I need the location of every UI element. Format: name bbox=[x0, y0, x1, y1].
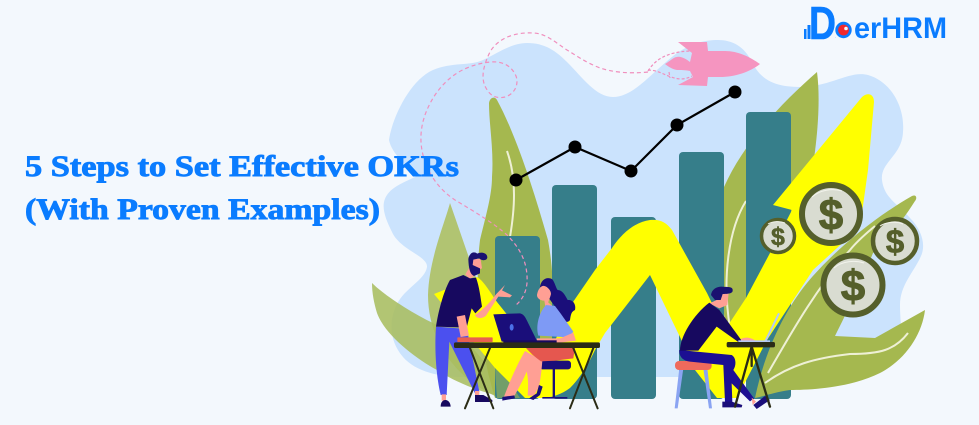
lower leaf tint over bar bbox=[495, 360, 520, 398]
logo target o: o bbox=[835, 37, 836, 39]
logo wordmark: erHRM bbox=[854, 12, 947, 45]
right upper leaf bbox=[755, 196, 925, 398]
title line 1: 5 Steps to Set Effective OKRs bbox=[25, 150, 459, 183]
dollar coins bbox=[762, 185, 917, 314]
line chart bbox=[510, 86, 742, 186]
tall left leaf bbox=[478, 98, 553, 398]
coin small bbox=[762, 220, 794, 252]
coin right bbox=[873, 219, 917, 263]
logo target o bbox=[835, 23, 850, 39]
seated man bbox=[679, 287, 770, 409]
background blob bbox=[384, 40, 923, 377]
coin top: $ bbox=[819, 191, 843, 240]
coin small: $ bbox=[771, 223, 785, 251]
rocket bbox=[665, 42, 760, 86]
yellow growth arrow bbox=[434, 94, 874, 398]
logo bbox=[804, 0, 947, 49]
stool bbox=[675, 361, 712, 408]
leaf behind bars bbox=[719, 72, 819, 335]
dashed flight path bbox=[421, 33, 648, 306]
laptop screen bbox=[765, 313, 779, 341]
laptop and books bbox=[457, 313, 557, 343]
title bbox=[25, 150, 459, 226]
title line 2: (With Proven Examples) bbox=[25, 193, 380, 226]
book stack bbox=[457, 337, 493, 342]
left small leaf bbox=[428, 203, 520, 396]
coin top bbox=[802, 185, 860, 243]
logo bars bbox=[804, 25, 810, 39]
left lower leaf bbox=[372, 283, 515, 398]
middle leaf vein bbox=[727, 201, 746, 328]
desk scene with man and woman bbox=[435, 252, 600, 408]
rocket trail loop bbox=[648, 51, 692, 79]
man at small desk bbox=[675, 287, 779, 409]
right leaf veins bbox=[765, 226, 908, 383]
small desk bbox=[727, 342, 775, 407]
tall leaf vein bbox=[507, 151, 514, 237]
woman bbox=[502, 278, 576, 401]
coin highlights bbox=[768, 190, 903, 268]
desk bbox=[454, 342, 600, 408]
coin bottom: $ bbox=[841, 262, 865, 311]
bar chart bbox=[495, 112, 791, 399]
coin right: $ bbox=[886, 223, 904, 260]
coin bottom bbox=[824, 256, 882, 314]
standing man bbox=[435, 252, 512, 407]
